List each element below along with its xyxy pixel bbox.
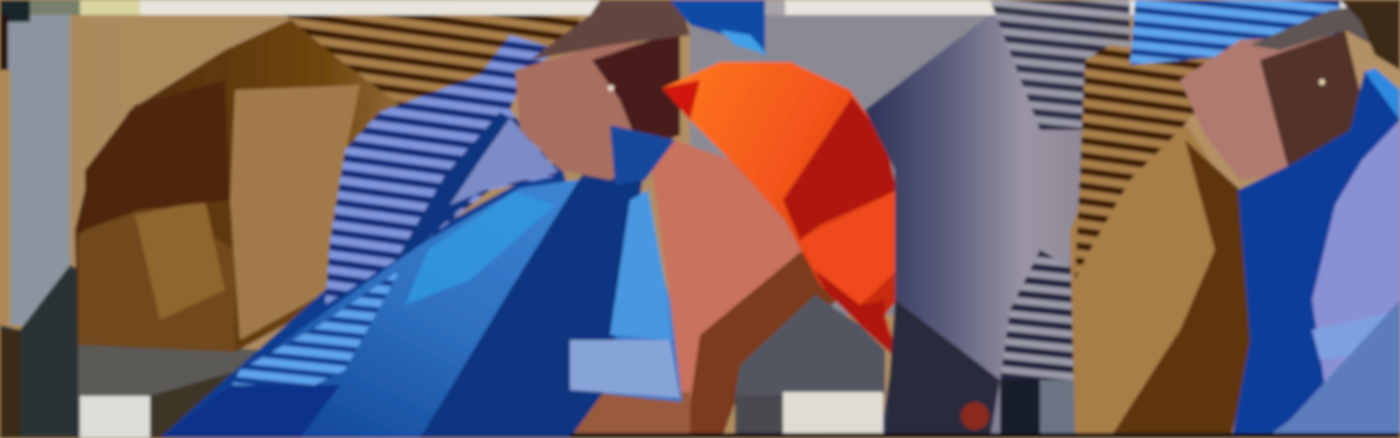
worker 3 grey striped shirt <box>865 0 1130 438</box>
worker 1 brown jacket <box>75 15 580 352</box>
tool in hand <box>961 402 989 430</box>
worker 4 blue shirt <box>1232 68 1400 438</box>
orange hard hat <box>662 62 900 362</box>
worker 1 striped blue shirt <box>325 35 560 305</box>
sky strip with foliage <box>0 0 1400 15</box>
grey wall behind centre <box>690 15 1060 315</box>
bottom left dark figure <box>0 265 300 438</box>
worker 2 grey sleeve <box>735 295 885 438</box>
stripes upper right <box>1075 0 1340 280</box>
worker 3 tan wall gap <box>1070 60 1250 438</box>
worker 4 head <box>1180 0 1400 180</box>
worker 2 shoulder and arm <box>565 130 850 438</box>
dark bottom edge <box>570 433 1400 438</box>
gap fill beneath shirts <box>160 160 600 438</box>
worker 3 brown shadow <box>1110 140 1255 438</box>
left pillar <box>0 0 70 325</box>
worker 2 head and cap <box>515 0 768 185</box>
worker 2 blue shirt <box>160 165 682 438</box>
